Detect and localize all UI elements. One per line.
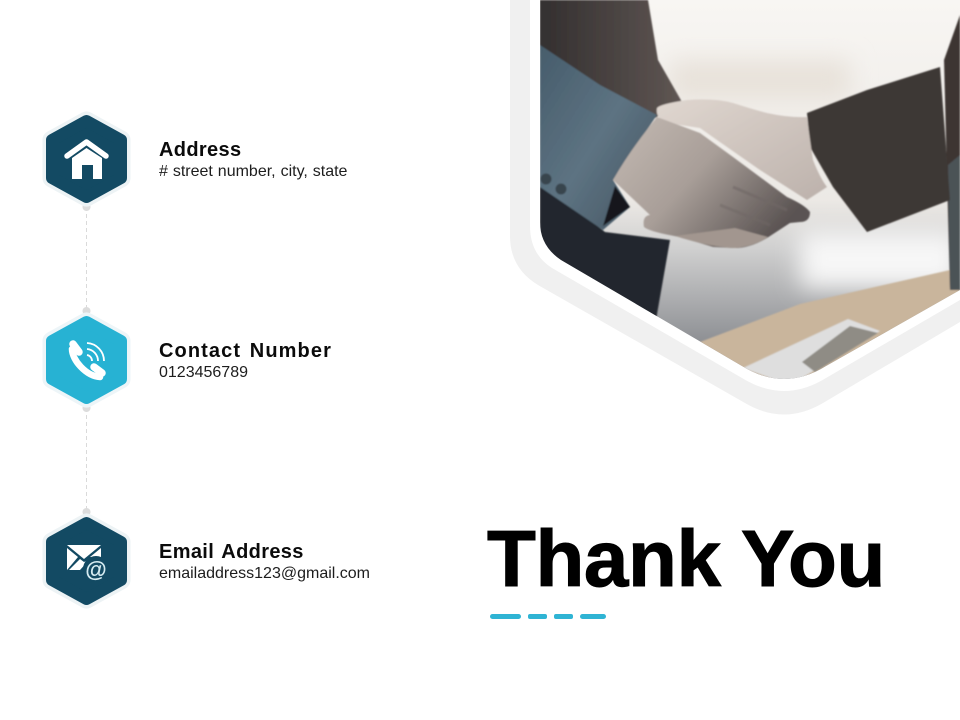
text: contact number: Contact Number — [159, 340, 332, 362]
text: contact number: 0123456789 — [159, 364, 248, 381]
text: address: # street number, city, state — [159, 163, 347, 180]
icon: house in navy hexagon — [52, 121, 121, 197]
timeline connectors — [82, 203, 90, 516]
text: contact number — [159, 340, 332, 381]
text: email address — [159, 541, 370, 582]
text: address — [159, 139, 347, 180]
text: email address: Email Address — [159, 541, 304, 563]
accent dashes — [490, 614, 606, 619]
icon: envelope in navy hexagon: @ — [85, 557, 107, 582]
handshake photo — [540, 0, 960, 400]
icon: phone in cyan hexagon — [52, 322, 121, 398]
text: address: Address — [159, 139, 241, 161]
hexagon ring frame — [510, 0, 960, 414]
text: email address: emailaddress123@gmail.com — [159, 565, 370, 582]
icon: envelope in navy hexagon — [52, 523, 121, 599]
title: Thank You — [487, 514, 885, 603]
